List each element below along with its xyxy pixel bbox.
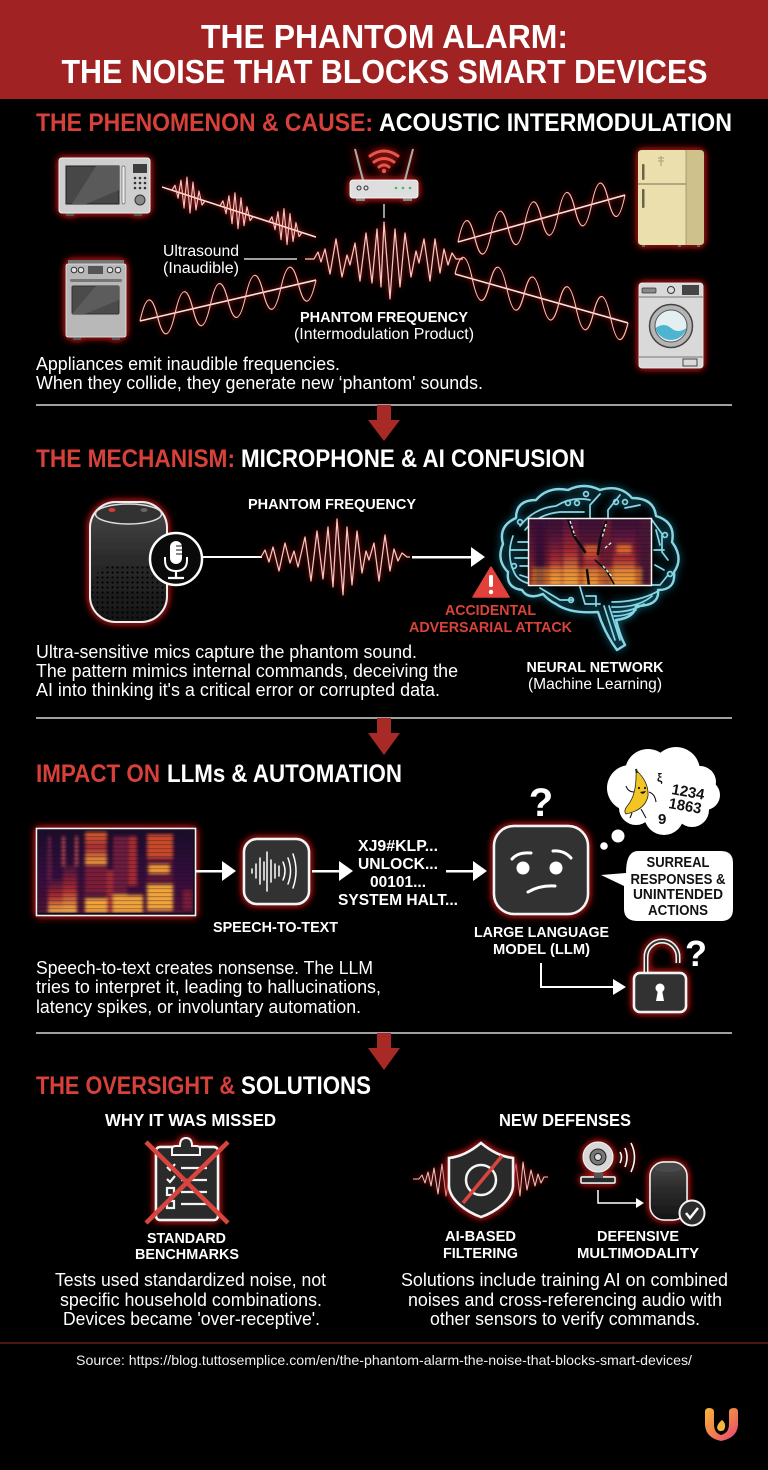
callout: surreal responses: SURREAL xyxy=(646,855,710,871)
label: accidental adversarial attack xyxy=(409,602,572,636)
section 4: oversight and solutions xyxy=(36,1072,728,1329)
heading: oversight: THE OVERSIGHT & xyxy=(36,1072,235,1100)
text block: impact: latency spikes, or involuntary automation. xyxy=(36,996,361,1017)
label: ultrasound: Ultrasound xyxy=(163,243,239,260)
text block: mechanism: The pattern mimics internal commands, deceiving the xyxy=(36,660,458,681)
label: AI-based filtering: AI-BASED xyxy=(445,1228,516,1245)
icon: washing machine xyxy=(639,283,703,368)
text block: garbled output: 00101... xyxy=(370,874,426,891)
text block: mechanism: AI into thinking it's a critical error or corrupted data. xyxy=(36,679,440,700)
arrow: LLM to unlock xyxy=(541,963,626,995)
label: ultrasound xyxy=(163,243,297,277)
icon: neural network brain xyxy=(500,486,679,650)
text block: mechanism xyxy=(36,641,458,700)
text block: impact: Speech-to-text creates nonsense. The LLM xyxy=(36,957,373,978)
heading: phenomenon xyxy=(36,109,732,137)
arrow: wave to brain xyxy=(412,547,485,567)
icon: thought cloud xyxy=(600,747,720,850)
label: speech-to-text: SPEECH-TO-TEXT xyxy=(213,919,338,936)
line: mic to wave xyxy=(203,556,262,558)
text block: garbled output: UNLOCK... xyxy=(358,856,438,873)
text block: oversight xyxy=(55,1269,326,1329)
section 1: phenomenon and cause xyxy=(36,109,732,393)
icon: warning triangle xyxy=(473,567,509,597)
text: cloud numbers xyxy=(657,771,706,828)
text block: garbled output: XJ9#KLP... xyxy=(358,838,438,855)
icon: speech-to-text xyxy=(244,839,309,904)
chart: input spectrogram xyxy=(36,828,196,916)
wave: captured phantom frequency xyxy=(261,519,410,595)
heading: impact xyxy=(36,760,402,788)
label: defensive multimodality: MULTIMODALITY xyxy=(577,1245,699,1262)
heading: oversight xyxy=(36,1072,371,1100)
wave: refrigerator emission xyxy=(458,176,625,261)
heading: mechanism xyxy=(36,445,585,473)
icon: crossed clipboard xyxy=(146,1138,228,1223)
label: phantom frequency: PHANTOM FREQUENCY xyxy=(300,309,468,326)
heading: mechanism: THE MECHANISM: xyxy=(36,445,235,473)
label: large language model: LARGE LANGUAGE xyxy=(474,924,609,941)
subheading: new defenses: NEW DEFENSES xyxy=(499,1110,631,1130)
icon: microwave xyxy=(59,158,150,216)
label: standard benchmarks: STANDARD xyxy=(147,1230,226,1247)
text: cloud numbers: ξ xyxy=(657,771,663,785)
heading: impact: IMPACT ON xyxy=(36,760,160,788)
callout: surreal responses xyxy=(601,851,733,921)
label: defensive multimodality: DEFENSIVE xyxy=(597,1228,679,1245)
callout: surreal responses: UNINTENDED xyxy=(633,887,723,903)
icon: question mark: ? xyxy=(529,781,553,825)
label: AI-based filtering xyxy=(443,1228,518,1262)
chart: corrupted spectrogram xyxy=(528,518,652,586)
text: cloud numbers: 1234 xyxy=(670,781,706,804)
text: cloud numbers: 1863 xyxy=(667,795,703,818)
heading: phenomenon: THE PHENOMENON & CAUSE: xyxy=(36,109,373,137)
label: ultrasound: (Inaudible) xyxy=(163,260,239,277)
icon: AI shield xyxy=(449,1143,513,1217)
icon: filtering wave xyxy=(413,1162,548,1196)
text block: mechanism: Ultra-sensitive mics capture the phantom sound. xyxy=(36,641,417,662)
section 3: impact xyxy=(36,747,733,1017)
wave: oven emission xyxy=(140,261,316,340)
label: large language model xyxy=(474,924,609,958)
arrow: section 3 to 4 xyxy=(368,1033,400,1070)
label: phantom frequency: (Intermodulation Product) xyxy=(294,326,474,343)
arrow: spectrogram to speech-to-text xyxy=(195,861,236,881)
label: accidental adversarial attack: ACCIDENTAL xyxy=(445,602,536,619)
section 2: mechanism xyxy=(36,445,679,700)
heading: oversight: SOLUTIONS xyxy=(241,1072,371,1100)
title: THE NOISE THAT BLOCKS SMART DEVICES xyxy=(62,53,708,90)
text block: garbled output xyxy=(338,838,458,909)
text block: oversight: specific household combinations. xyxy=(60,1289,322,1310)
title: THE PHANTOM ALARM: xyxy=(201,18,568,55)
header banner xyxy=(0,0,768,99)
label: phantom frequency xyxy=(294,309,474,343)
callout: surreal responses: RESPONSES & xyxy=(630,872,726,888)
label: defensive multimodality xyxy=(577,1228,699,1262)
icon: small speaker with check xyxy=(650,1162,704,1226)
label: neural network: NEURAL NETWORK xyxy=(526,659,664,676)
title xyxy=(62,18,708,90)
text: cloud numbers: 9 xyxy=(658,811,666,828)
text block: solutions xyxy=(401,1269,728,1329)
icon: smart speaker xyxy=(90,502,167,622)
connector: router to phantom wave xyxy=(383,204,385,218)
wave: phantom frequency xyxy=(305,222,463,299)
label: phantom frequency 2: PHANTOM FREQUENCY xyxy=(248,496,416,513)
source line: Source: https://blog.tuttosemplice.com/en/the-phantom-alarm-the-noise-that-blocks-smart-devices/ xyxy=(76,1352,692,1368)
icon: oven stove xyxy=(66,260,126,340)
text block: appliances: Appliances emit inaudible frequencies. xyxy=(36,353,340,374)
arrow: section 2 to 3 xyxy=(368,718,400,755)
label: standard benchmarks xyxy=(135,1230,239,1263)
subheading: why it was missed: WHY IT WAS MISSED xyxy=(105,1110,276,1130)
icon: confused LLM face xyxy=(494,826,588,914)
callout: surreal responses: ACTIONS xyxy=(648,903,708,919)
icon: refrigerator xyxy=(638,150,704,247)
wave: microwave emission xyxy=(162,169,316,254)
heading: mechanism: MICROPHONE & AI CONFUSION xyxy=(241,445,585,473)
label: accidental adversarial attack: ADVERSARIAL ATTACK xyxy=(409,619,572,636)
text block: solutions: noises and cross-referencing audio with xyxy=(408,1289,722,1310)
text block: oversight: Tests used standardized noise, not xyxy=(55,1269,326,1290)
arrow: output to LLM xyxy=(446,861,487,881)
spectrogram frame xyxy=(528,518,652,586)
text block: solutions: Solutions include training AI on combined xyxy=(401,1269,728,1290)
icon: lock question mark: ? xyxy=(685,933,707,974)
label: large language model: MODEL (LLM) xyxy=(493,941,590,958)
text block: garbled output: SYSTEM HALT... xyxy=(338,892,458,909)
text block: solutions: other sensors to verify commands. xyxy=(430,1308,700,1329)
heading: impact: LLMs & AUTOMATION xyxy=(167,760,402,788)
heading: phenomenon: ACOUSTIC INTERMODULATION xyxy=(379,109,732,137)
text block: appliances: When they collide, they generate new ‘phantom' sounds. xyxy=(36,372,483,393)
icon: router xyxy=(350,149,418,201)
label: neural network: (Machine Learning) xyxy=(528,676,662,693)
icon: camera xyxy=(581,1142,634,1183)
wave: washer emission xyxy=(455,255,628,342)
arrow: section 1 to 2 xyxy=(368,405,400,441)
text block: oversight: Devices became 'over-receptive'. xyxy=(63,1308,320,1329)
arrow: camera to speaker xyxy=(598,1190,644,1208)
text block: appliances xyxy=(36,353,483,393)
icon: banana xyxy=(625,769,656,818)
logo xyxy=(705,1408,738,1441)
arrow: speech-to-text to output xyxy=(312,861,353,881)
label: neural network xyxy=(526,659,664,693)
icon: microphone badge xyxy=(150,533,202,585)
icon: open padlock xyxy=(634,941,686,1012)
label: AI-based filtering: FILTERING xyxy=(443,1245,518,1262)
text block: impact xyxy=(36,957,381,1017)
text block: impact: tries to interpret it, leading to hallucinations, xyxy=(36,976,381,997)
label: standard benchmarks: BENCHMARKS xyxy=(135,1246,239,1263)
